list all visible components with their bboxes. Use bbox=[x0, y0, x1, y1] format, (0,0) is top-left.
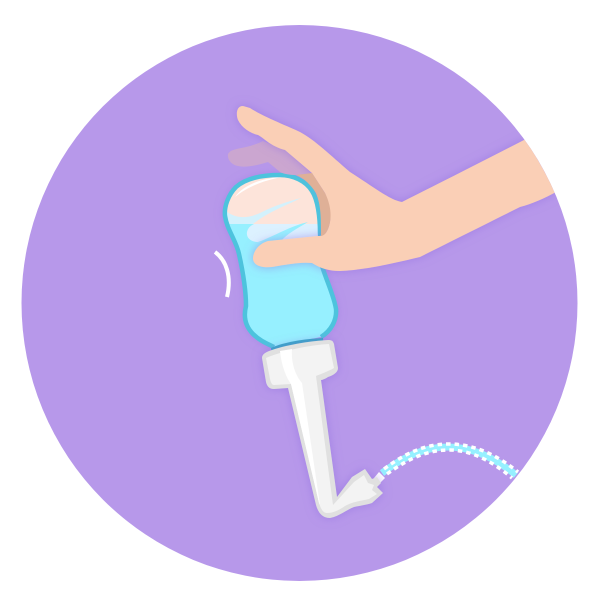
hand bbox=[237, 106, 556, 271]
blurred finger motion bbox=[228, 141, 311, 175]
bottle neck band bbox=[271, 338, 324, 354]
bottle bbox=[222, 172, 336, 354]
motion arc bbox=[215, 252, 229, 297]
finger shadow bbox=[296, 173, 331, 236]
bottle outline bbox=[225, 175, 336, 347]
air and water inside bottle bbox=[227, 177, 318, 242]
nozzle bbox=[262, 340, 385, 518]
tube bbox=[382, 444, 518, 478]
